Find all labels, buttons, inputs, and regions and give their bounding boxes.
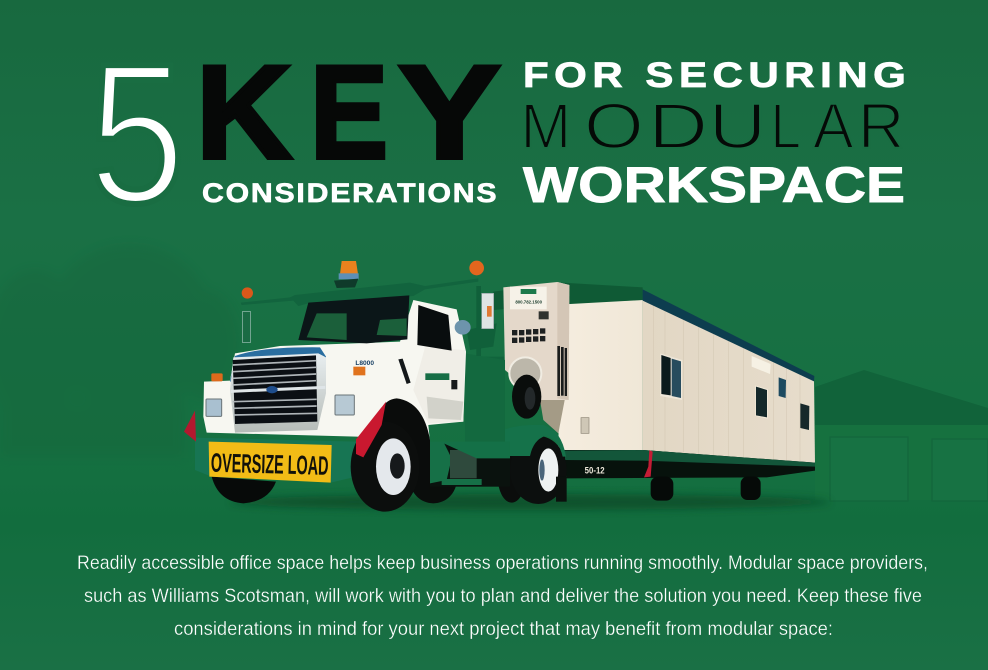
trailer: unit logo	[521, 289, 536, 294]
title: MODULAR: A	[813, 91, 854, 162]
truck cab: rear wheel under cab	[410, 457, 457, 503]
title: FOR SECURING: FOR SECURING	[523, 56, 906, 95]
trailer: vent grid	[512, 328, 545, 343]
intro paragraph: line 2: such as Williams Scotsman, will work with you to plan and deliver the solution you need. Keep these five	[84, 585, 922, 607]
truck cab: fuel tank	[428, 442, 452, 483]
title: KEY	[196, 38, 501, 187]
title: KEY: E	[310, 38, 388, 187]
background: faded building	[815, 370, 988, 501]
truck cab: white cab	[203, 300, 466, 442]
truck cab: door text panel	[427, 397, 463, 420]
truck cab: oversize load sign	[209, 442, 332, 483]
trailer: end wall	[558, 300, 643, 452]
trailer: fan	[509, 357, 541, 389]
title: KEY: K	[196, 39, 292, 187]
truck cab: exhaust stack	[476, 286, 481, 356]
truck rear: fender	[505, 425, 566, 457]
intro paragraph: line 1: Readily accessible office space helps keep business operations running smoothly. Modular space providers,	[77, 552, 928, 574]
trailer: red flag	[644, 450, 653, 477]
trailer: side wall	[643, 300, 815, 463]
trailer: frame label: 50-12	[585, 465, 605, 475]
trailer: windows	[660, 353, 682, 400]
ground shadow	[230, 494, 830, 510]
trailer: side vent	[557, 346, 567, 396]
truck cab: grille bars	[233, 361, 317, 415]
truck cab: door handle	[451, 380, 457, 389]
truck cab: chassis	[428, 443, 510, 487]
truck rear: green body	[480, 357, 504, 445]
truck cab: amber markers	[211, 373, 223, 381]
title: numeral 5: 5	[89, 23, 185, 245]
trailer	[493, 282, 815, 501]
trailer: phone number: 800.782.1500	[515, 300, 542, 306]
title: KEY: Y	[398, 38, 501, 187]
truck cab: mirror	[482, 293, 494, 329]
truck cab: side window	[417, 305, 452, 351]
title: MODULAR: O	[584, 90, 644, 162]
trailer: roof	[493, 283, 643, 310]
truck cab: front tyre	[212, 477, 276, 503]
truck cab: wiper arm	[398, 359, 411, 384]
truck cab: roof beacon	[340, 261, 358, 274]
truck rear: hub	[538, 448, 558, 492]
truck cab: wheel arch	[367, 398, 430, 490]
truck rear	[480, 357, 567, 504]
truck cab: green box body	[465, 353, 505, 445]
title: MODULAR: D	[648, 90, 708, 162]
truck cab: left red flag	[184, 411, 196, 442]
truck cab: roof lights	[469, 261, 484, 275]
trailer: siding ribs	[653, 305, 800, 462]
title: CONSIDERATIONS: CONSIDERATIONS	[202, 178, 497, 209]
truck cab: left mirror	[242, 312, 251, 342]
title: MODULAR: L	[771, 90, 801, 162]
intro paragraph	[77, 552, 928, 640]
truck cab: door logo	[425, 373, 449, 380]
background: faded trees	[0, 245, 240, 458]
truck rear: mounted spare tyre	[512, 375, 541, 419]
truck rear: wheels	[498, 451, 526, 503]
title	[89, 23, 906, 245]
truck cab: wheel hub	[376, 438, 411, 495]
title: MODULAR	[520, 90, 904, 162]
truck cab	[184, 261, 510, 512]
truck cab: model badge: L8000	[355, 360, 374, 367]
trailer: roof edge	[643, 289, 814, 381]
trailer: frame	[560, 450, 815, 478]
trailer: hitch	[540, 398, 565, 433]
trailer: sign	[752, 356, 771, 374]
truck cab: side mirror	[455, 320, 471, 335]
truck cab: headlights	[206, 399, 222, 416]
title: MODULAR: U	[709, 91, 766, 162]
title: MODULAR: R	[858, 90, 904, 162]
title: MODULAR: M	[520, 91, 571, 162]
truck cab: main wheel	[351, 422, 419, 512]
truck cab: hood stripe	[230, 347, 326, 390]
truck cab: bumper	[195, 438, 359, 483]
truck cab: oversize load text: OVERSIZE LOAD	[210, 448, 329, 481]
intro paragraph: line 3: considerations in mind for your next project that may benefit from modular space:	[174, 618, 833, 640]
truck cab: grille chrome surround	[230, 353, 326, 433]
truck cab: windshield	[298, 295, 409, 343]
truck cab: grille	[233, 355, 317, 424]
truck cab: visor	[241, 278, 478, 306]
trailer: reefer unit	[503, 282, 569, 400]
truck cab: ford badge	[266, 386, 278, 393]
truck cab: door shade	[413, 347, 465, 423]
trailer: junction box	[581, 418, 589, 433]
trailer: axle wheels	[651, 477, 673, 501]
title: WORKSPACE: WORKSPACE	[523, 157, 905, 213]
truck cab: red flag	[356, 402, 386, 457]
